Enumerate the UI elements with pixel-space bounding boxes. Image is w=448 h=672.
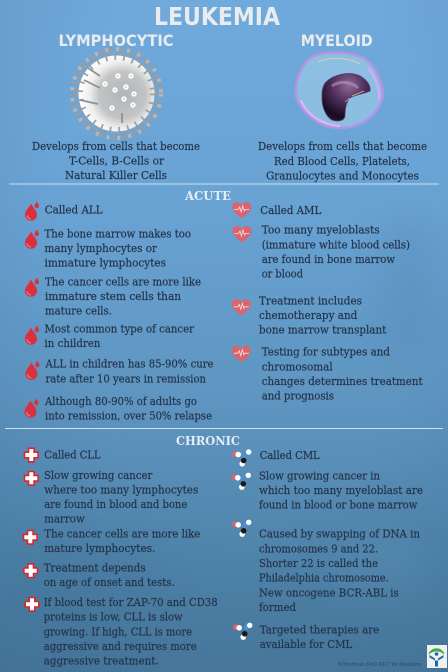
text: chronic myeloid points: found in blood or bone marrow — [259, 499, 418, 512]
text: chronic lymphocytic points: growing. If high, CLL is more — [44, 625, 192, 638]
text: chronic lymphocytic points: are found in blood and bone — [44, 498, 188, 511]
text: chronic myeloid points: Called CML — [260, 449, 320, 462]
text: acute myeloid points: (immature white blood cells) — [262, 238, 410, 251]
text: chronic myeloid points: Caused by swapping of DNA in — [259, 528, 420, 541]
text: acute myeloid points: Treatment includes — [259, 294, 362, 307]
text: chronic lymphocytic points — [44, 448, 218, 668]
panel: acute lymphocytic list — [24, 202, 214, 423]
heading: acute: ACUTE — [184, 188, 231, 203]
text: acute lymphocytic points: The bone marrow makes too — [44, 227, 191, 240]
text: lymphocytic description — [32, 140, 200, 182]
text: acute lymphocytic points: into remission, over 50% relapse — [45, 410, 212, 423]
text: acute lymphocytic points: The cancer cells are more like — [45, 275, 201, 288]
text: chronic lymphocytic points: aggressive and requires more — [44, 640, 197, 653]
panel: chronic myeloid list — [232, 449, 423, 651]
text: chronic myeloid points: Shorter 22 is called the — [259, 557, 378, 570]
text: chronic lymphocytic points: where too many lymphocytes — [44, 483, 199, 496]
panel: acute myeloid list — [232, 202, 423, 403]
heading: lymphocytic: LYMPHOCYTIC — [58, 31, 174, 50]
text: chronic lymphocytic points: The cancer cells are more like — [44, 527, 201, 540]
text: acute myeloid points: changes determines treatment — [262, 375, 423, 388]
text: chronic lymphocytic points: mature lymphocytes. — [44, 542, 155, 555]
text: chronic myeloid points: available for CML — [260, 638, 353, 651]
text: acute lymphocytic points: Called ALL — [45, 203, 103, 216]
text: acute myeloid points: bone marrow transplant — [259, 324, 387, 337]
icon: lymphocyte cell — [72, 49, 161, 138]
icons: blood drops — [24, 202, 40, 418]
text: chronic lymphocytic points: proteins is low, CLL is slow — [44, 611, 183, 624]
text: lymphocytic description: Natural Killer Cells — [65, 169, 167, 182]
text: chronic myeloid points: which too many myeloblast are — [259, 484, 423, 497]
icons: molecules — [232, 449, 252, 640]
text: acute myeloid points: Too many myeloblasts — [262, 224, 380, 237]
text: acute lymphocytic points: ALL in children has 85-90% cure — [45, 358, 214, 371]
text: chronic myeloid points — [259, 449, 423, 651]
text: chronic myeloid points: Targeted therapies are — [260, 623, 380, 636]
credit text: KDHoffman,PhD 2017 for Medivizor — [338, 662, 422, 668]
panel: chronic lymphocytic list — [24, 448, 218, 668]
text: chronic myeloid points: Slow growing cancer in — [259, 469, 380, 482]
text: acute myeloid points: chemotherapy and — [259, 309, 357, 322]
text: acute lymphocytic points: immature stem cells than — [45, 290, 181, 303]
text: chronic lymphocytic points: Called CLL — [44, 448, 101, 461]
text: acute lymphocytic points: immature lymphocytes — [44, 257, 166, 270]
text: acute myeloid points — [259, 204, 423, 403]
text: chronic myeloid points: New oncogene BCR-ABL is — [259, 586, 399, 599]
text: acute lymphocytic points: many lymphocytes or — [44, 242, 158, 255]
text: myeloid description — [258, 140, 427, 183]
heading: chronic: CHRONIC — [176, 433, 240, 448]
text: acute myeloid points: Called AML — [260, 204, 322, 217]
text: myeloid description: Red Blood Cells, Platelets, — [274, 155, 410, 168]
title: LEUKEMIA — [154, 2, 281, 31]
text: acute lymphocytic points: in children — [44, 337, 100, 350]
text: chronic myeloid points: formed — [259, 601, 296, 614]
text: chronic lymphocytic points: aggressive treatment. — [44, 655, 159, 668]
text: chronic lymphocytic points: on age of onset and tests. — [44, 576, 175, 589]
text: acute myeloid points: or blood — [262, 267, 303, 280]
text: myeloid description: Develops from cells that become — [258, 140, 427, 153]
text: chronic lymphocytic points: If blood test for ZAP-70 and CD38 — [44, 596, 218, 609]
text: acute lymphocytic points: mature cells. — [45, 305, 112, 318]
text: myeloid description: Granulocytes and Monocytes — [266, 170, 419, 183]
text: acute lymphocytic points: Most common type of cancer — [44, 322, 195, 335]
text: acute myeloid points: are found in bone marrow — [262, 253, 395, 266]
icon: myeloid cell — [296, 52, 383, 128]
text: lymphocytic description: T-Cells, B-Cells or — [69, 154, 165, 168]
text: acute myeloid points: Testing for subtypes and — [262, 346, 390, 359]
text: acute lymphocytic points — [44, 203, 214, 423]
text: acute myeloid points: chromosomal — [262, 360, 333, 373]
text: chronic myeloid points: Philadelphia chromosome. — [259, 572, 389, 585]
text: acute myeloid points: and prognosis — [262, 390, 334, 403]
text: acute lymphocytic points: rate after 10 years in remission — [46, 372, 206, 385]
text: chronic lymphocytic points: marrow — [44, 513, 85, 526]
text: acute lymphocytic points: Although 80-90% of adults go — [44, 395, 197, 408]
heading: myeloid: MYELOID — [301, 31, 373, 50]
icon: medivizor logo — [427, 645, 447, 668]
icons: hearts — [232, 202, 252, 362]
text: lymphocytic description: Develops from cells that become — [32, 140, 200, 153]
icons: medical crosses — [24, 448, 39, 611]
text: chronic myeloid points: chromosomes 9 and 22. — [259, 542, 378, 555]
text: chronic lymphocytic points: Treatment depends — [44, 561, 146, 574]
text: chronic lymphocytic points: Slow growing cancer — [44, 469, 153, 482]
